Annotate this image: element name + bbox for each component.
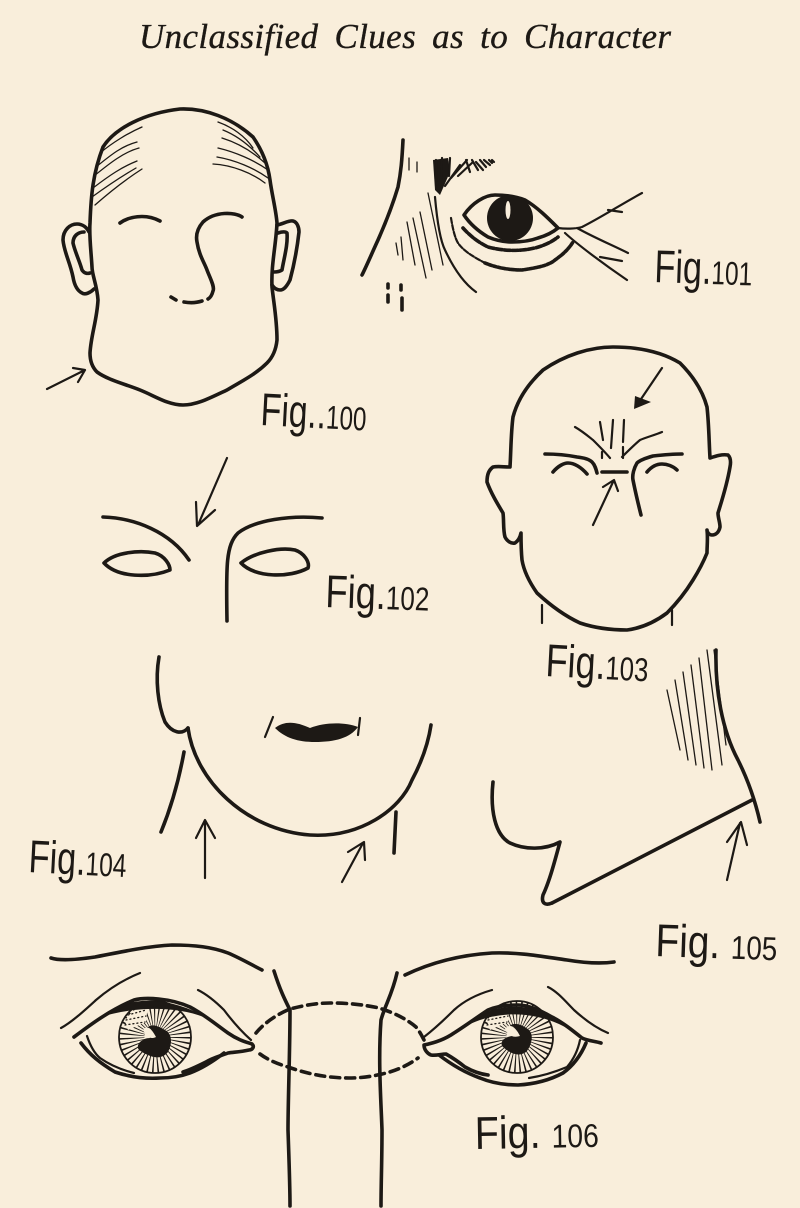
label: Fig. 101: Fig.101 bbox=[654, 240, 753, 295]
label: Fig. 105: Fig. 105 bbox=[655, 914, 778, 970]
label: Fig. 100: Fig..100 bbox=[259, 383, 368, 441]
left eye bbox=[61, 973, 253, 1078]
figure 106: pair of eyes bbox=[51, 945, 614, 1206]
arrow bbox=[593, 480, 618, 525]
arrow bbox=[637, 368, 662, 405]
label: Fig. 102: Fig.102 bbox=[325, 565, 430, 621]
arrow bbox=[727, 822, 747, 880]
right ear bbox=[272, 221, 299, 290]
arrow bbox=[196, 458, 227, 526]
arrow bbox=[342, 842, 365, 882]
right eye bbox=[424, 987, 608, 1085]
arrow bbox=[196, 820, 215, 878]
figure 105: neck and collar bbox=[492, 650, 760, 904]
figure 100: bald head bbox=[47, 109, 299, 405]
figure 103: bald head with frown lines bbox=[487, 347, 731, 630]
figure 104: jaw and mouth bbox=[157, 657, 431, 882]
figure 102: brows and eyes bbox=[103, 458, 322, 621]
label: Fig. 106: Fig. 106 bbox=[474, 1105, 599, 1159]
iris bbox=[119, 1001, 191, 1073]
dashed glasses outline bbox=[256, 1003, 424, 1078]
arrow bbox=[47, 368, 85, 389]
right eyebrow bbox=[405, 953, 614, 975]
label: Fig. 104: Fig.104 bbox=[27, 830, 128, 887]
brow hatching bbox=[433, 158, 494, 195]
figure 101: eye with wrinkles bbox=[362, 140, 642, 310]
left eyebrow bbox=[51, 945, 262, 970]
iris bbox=[481, 1001, 553, 1073]
label: Fig. 103: Fig.103 bbox=[544, 634, 650, 691]
title: Unclassified Clues as to Character bbox=[139, 17, 671, 56]
nose lines bbox=[274, 971, 290, 1206]
left ear bbox=[63, 224, 94, 294]
